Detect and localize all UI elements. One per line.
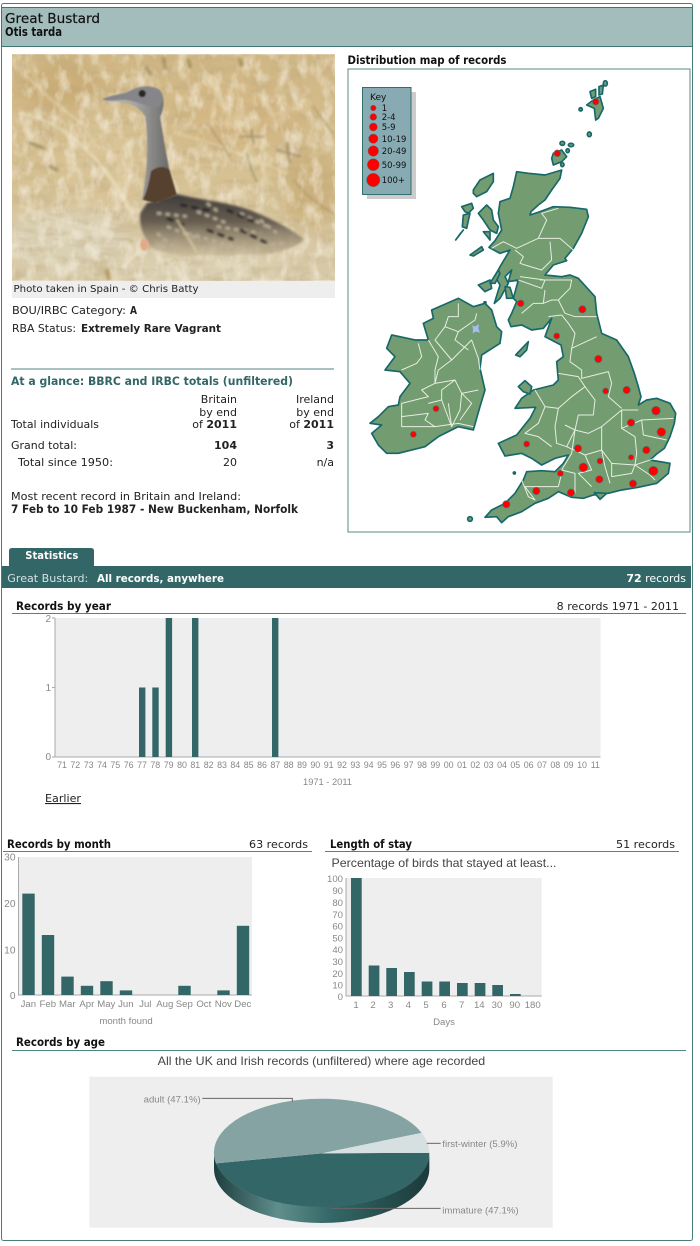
status line: RBA Status:	[12, 322, 76, 335]
pie label: immature: immature (47.1%)	[442, 1206, 519, 1216]
photo caption: Photo taken in Spain - © Chris Batty	[14, 284, 199, 295]
bar chart: records by year: 0	[45, 752, 51, 763]
total since 1950 row: n/a	[317, 456, 334, 469]
table column headings: of 2011	[289, 418, 334, 431]
bar chart: length of stay: 7	[459, 1000, 464, 1011]
bar chart: length of stay: 2	[370, 1000, 376, 1011]
bar chart: length of stay: 180	[525, 1000, 541, 1011]
bar chart: records by year: 95	[377, 760, 387, 770]
grand total row: 104	[214, 439, 237, 452]
bar chart: records by year: 73	[84, 760, 94, 770]
chart subtitle: Percentage of birds that stayed at least...	[332, 856, 556, 870]
pie label: first-winter: first-winter (5.9%)	[442, 1139, 517, 1150]
table column headings	[10, 393, 334, 431]
heading: records by age: Records by age	[16, 1035, 105, 1049]
bar chart: length of stay: 90	[509, 1000, 520, 1011]
bar chart: records by month: Dec	[234, 999, 252, 1010]
bar chart: records by year: 99	[430, 760, 440, 770]
bar chart: records by year: 87	[270, 760, 280, 770]
bar chart: records by year: 72	[70, 760, 80, 770]
map key	[362, 88, 416, 199]
Ireland	[370, 298, 502, 453]
bar chart: records by year: 2	[45, 614, 51, 625]
most recent record: 7 Feb to 10 Feb 1987 - New Buckenham, Norfolk	[11, 502, 298, 516]
panel: records by month	[3, 837, 312, 1027]
grand total row	[11, 439, 334, 452]
statistics bar: Great Bustard:	[7, 572, 88, 585]
bar chart: records by year: 09	[564, 760, 574, 770]
statistics bar	[2, 566, 691, 588]
bar chart: records by month: Sep	[176, 999, 193, 1010]
map key: Key	[370, 93, 387, 103]
bar chart: records by year: 89	[297, 760, 307, 770]
bar chart: records by year: 02	[470, 760, 480, 770]
map key: 5-9	[382, 123, 396, 133]
table column headings: Ireland	[296, 393, 334, 406]
panel: length of stay	[325, 837, 679, 1028]
map heading: Distribution map of records	[348, 53, 507, 67]
bar chart: length of stay: 30	[332, 957, 343, 968]
bar chart: records by year: 79	[164, 760, 174, 770]
bar chart: records by year: 1	[45, 683, 51, 694]
bar chart: records by month: 20	[4, 899, 16, 910]
bar chart: records by year: 84	[230, 760, 240, 770]
bar chart: records by year: 10	[577, 760, 587, 770]
bar chart: records by year: 97	[404, 760, 414, 770]
bar chart: length of stay: 30	[492, 1000, 502, 1011]
total since 1950 row: Total since 1950:	[17, 456, 113, 469]
bar chart: records by month: 30	[4, 852, 16, 864]
bar chart: records by year: 93	[350, 760, 360, 770]
bar chart: records by year: 88	[284, 760, 294, 770]
table column headings: of 2011	[192, 418, 237, 431]
heading: length of stay: Length of stay	[330, 837, 412, 851]
statistics tab	[9, 548, 94, 566]
bar chart: length of stay: 5	[423, 1000, 429, 1011]
bar chart: length of stay: 60	[332, 922, 343, 932]
panel: records by year	[12, 599, 686, 805]
grand total row: 3	[326, 439, 334, 452]
pie chart subtitle: All the UK and Irish records (unfiltered) where age recorded	[158, 1054, 485, 1068]
bar chart: records by year	[45, 614, 600, 787]
map key: 20-49	[382, 147, 406, 157]
county boundaries	[402, 208, 673, 500]
bar chart: records by year: 03	[484, 760, 494, 770]
bar chart: records by year: 92	[337, 760, 347, 770]
map key: 50-99	[382, 161, 406, 171]
earlier link: Earlier	[45, 792, 81, 805]
pie chart: age	[202, 1098, 441, 1223]
bar chart: length of stay: 40	[332, 945, 343, 956]
grand total row: Grand total:	[11, 439, 77, 452]
bar chart: records by year: 11	[591, 760, 600, 770]
title: Great Bustard	[5, 11, 100, 27]
statistics bar: 72 records	[626, 572, 686, 585]
bar chart: length of stay: 6	[441, 1000, 447, 1011]
bar chart: records by year: 77	[137, 760, 147, 770]
stay records count: 51 records	[616, 838, 675, 851]
Great Britain	[485, 170, 676, 523]
bar chart: records by month: Mar	[59, 999, 76, 1010]
bar chart: records by year: 81	[190, 760, 200, 770]
bar chart: length of stay: 20	[332, 969, 343, 980]
bar chart: records by month: Aug	[156, 999, 173, 1010]
bar chart: records by year: 78	[150, 760, 160, 770]
header banner	[2, 8, 692, 46]
statistics bar: All records, anywhere	[97, 572, 224, 585]
status line	[12, 322, 221, 335]
bar chart: length of stay: 100	[327, 874, 343, 885]
bar chart: records by year: 08	[550, 760, 560, 770]
table column headings: by end	[199, 406, 237, 419]
bar chart: records by month: Jun	[118, 999, 134, 1010]
bar chart: length of stay: 0	[338, 992, 343, 1003]
heading: records by year: Records by year	[16, 599, 111, 613]
bar chart: length of stay: 80	[332, 898, 343, 909]
map key: 100+	[382, 176, 405, 186]
panel heading: At a glance: BBRC and IRBC totals (unfiltered)	[11, 374, 293, 388]
pie chart background	[89, 1077, 553, 1228]
bar chart: records by month: Feb	[40, 999, 56, 1010]
bar chart: length of stay: 14	[474, 1000, 485, 1011]
statistics tab: Statistics	[25, 549, 79, 562]
category line: A	[130, 304, 137, 317]
bar chart: records by month: 0	[10, 991, 16, 1002]
map key: 10-19	[382, 135, 406, 145]
bar chart: records by year: 71	[57, 760, 67, 770]
total since 1950 row: 20	[223, 456, 237, 469]
bar chart: records by month: month found	[99, 1016, 153, 1027]
bar chart: records by year: 1971 - 2011	[303, 777, 352, 787]
bar chart: records by year: 76	[124, 760, 134, 770]
bar chart: length of stay: 90	[332, 886, 343, 897]
record dots	[410, 98, 666, 508]
most recent record	[11, 490, 298, 516]
photo caption	[12, 281, 335, 298]
bar chart: records by month: May	[97, 999, 116, 1010]
bar chart: records by month: Jul	[139, 999, 151, 1010]
records count: 8 records 1971 - 2011	[557, 600, 679, 613]
bar chart: records by year: 00	[444, 760, 454, 770]
bar chart: length of stay: 1	[353, 1000, 359, 1011]
bar chart: records by year: 82	[204, 760, 214, 770]
bar chart: records by year: 90	[310, 760, 320, 770]
bar chart: records by year: 98	[417, 760, 427, 770]
table column headings: Total individuals	[10, 418, 99, 431]
bar chart: records by year: 05	[510, 760, 520, 770]
bar chart: records by year: 74	[97, 760, 107, 770]
bar chart: length of stay: 3	[388, 1000, 393, 1011]
bar chart: records by year: 86	[257, 760, 267, 770]
bar chart: records by year: 83	[217, 760, 227, 770]
map key: 1	[382, 104, 387, 114]
total since 1950 row	[17, 456, 334, 469]
heading: records by month: Records by month	[7, 837, 111, 851]
table column headings: by end	[296, 406, 334, 419]
islands	[456, 81, 607, 521]
photo of great bustard	[12, 54, 335, 281]
bar chart: length of stay: 10	[332, 980, 343, 992]
Lough Neagh	[472, 324, 480, 333]
bar chart: records by year: 01	[457, 760, 467, 770]
panel: records by age	[12, 1035, 686, 1228]
panel: distribution map	[348, 69, 690, 532]
bar chart: records by month: Apr	[79, 999, 95, 1010]
bar chart: records by month: Jan	[21, 999, 36, 1010]
bar chart: records by year: 07	[537, 760, 547, 770]
bar chart: records by month: 10	[4, 946, 16, 956]
bar chart: length of stay: 50	[332, 934, 343, 944]
panel: at a glance totals	[10, 369, 334, 469]
bar chart: records by month: Oct	[196, 999, 212, 1010]
bird body	[140, 194, 304, 256]
bar chart: length of stay: Days	[433, 1017, 455, 1028]
bar chart: records by month: Nov	[215, 999, 232, 1010]
month records count: 63 records	[249, 838, 308, 851]
bar chart: records by year: 91	[324, 760, 334, 770]
bar chart: length of stay	[327, 874, 542, 1028]
status line: Extremely Rare Vagrant	[81, 322, 221, 335]
bird head and neck	[103, 86, 177, 251]
bar chart: records by year: 04	[497, 760, 507, 770]
pie label: adult: adult (47.1%)	[144, 1094, 201, 1106]
bar chart: records by year: 75	[110, 760, 120, 770]
bar chart: records by year: 94	[364, 760, 374, 770]
bar chart: records by year: 85	[244, 760, 254, 770]
bar chart: records by month	[4, 852, 252, 1027]
bar chart: records by year: 96	[390, 760, 400, 770]
bar chart: length of stay: 4	[406, 1000, 412, 1011]
bar chart: length of stay: 70	[332, 910, 343, 921]
category line: BOU/IRBC Category:	[12, 304, 126, 317]
table column headings: Britain	[201, 393, 237, 406]
bar chart: records by year: 80	[177, 760, 187, 770]
scientific name: Otis tarda	[5, 25, 62, 39]
bar chart: records by year: 06	[524, 760, 534, 770]
map key: 2-4	[382, 113, 396, 123]
map of Britain and Ireland	[370, 81, 676, 523]
most recent record: Most recent record in Britain and Ireland:	[11, 490, 241, 503]
